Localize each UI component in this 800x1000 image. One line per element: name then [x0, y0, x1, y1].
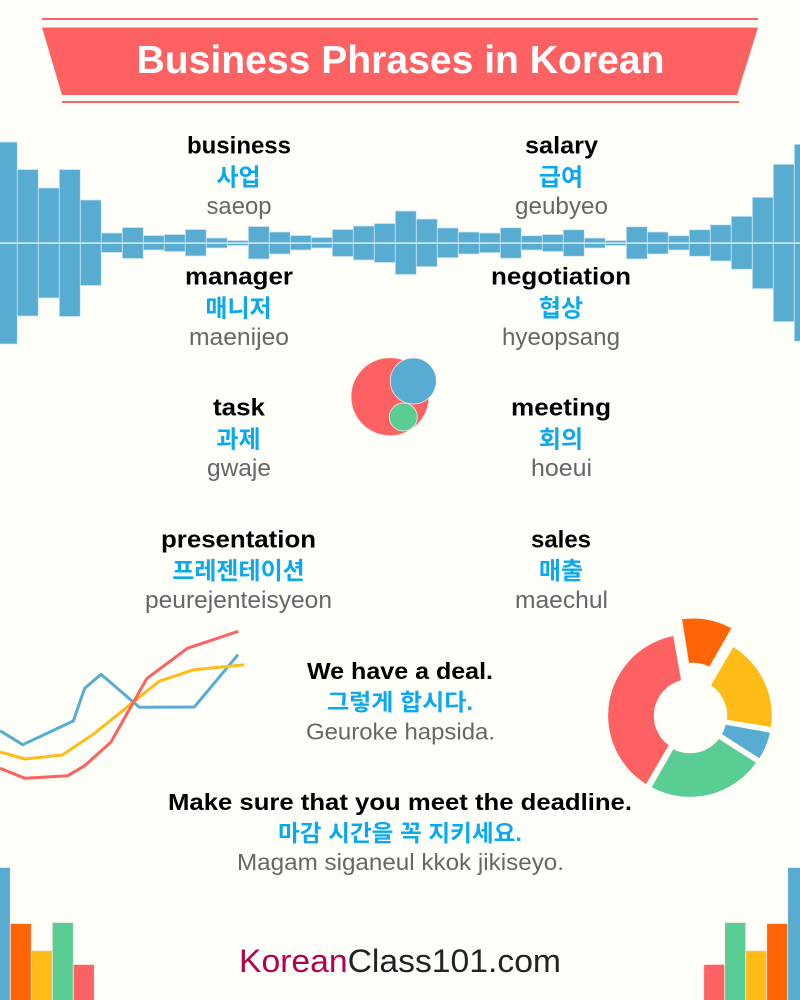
phrase: salary: 급여: [539, 164, 583, 192]
phrase: meeting: hoeui: [531, 455, 592, 482]
phrase: presentation: presentation: [161, 526, 316, 554]
phrase: business: [187, 132, 291, 220]
phrase: manager: maenijeo: [189, 324, 289, 351]
phrase: business: business: [187, 132, 291, 160]
phrase: negotiation: 협상: [539, 296, 583, 322]
phrase: manager: manager: [185, 264, 293, 290]
line chart: [0, 631, 244, 778]
waveform chart: [0, 142, 800, 344]
phrase: task: gwaje: [207, 455, 271, 482]
phrase: meet the deadline: Magam siganeul kkok jikiseyo.: [237, 849, 564, 875]
phrase: salary: salary: [525, 132, 599, 160]
phrase: we have a deal: 그렇게 합시다.: [327, 689, 473, 715]
phrase: presentation: [145, 526, 332, 614]
phrase: manager: [185, 264, 293, 351]
phrase: meeting: 회의: [539, 426, 583, 454]
title banner: [42, 18, 758, 103]
phrase: sales: maechul: [515, 587, 608, 614]
donut chart: [608, 619, 772, 797]
phrase: meeting: [511, 394, 611, 482]
phrase: sales: [515, 526, 608, 614]
phrase: meet the deadline: [168, 789, 632, 875]
phrase: negotiation: [491, 264, 631, 351]
phrase: we have a deal: [306, 658, 495, 744]
bar chart: bottom right: [704, 868, 800, 1000]
phrase: manager: 매니저: [205, 296, 272, 322]
phrase: presentation: peurejenteisyeon: [145, 587, 332, 614]
phrase: salary: geubyeo: [515, 193, 608, 220]
phrase: we have a deal: We have a deal.: [307, 658, 493, 684]
phrase: meet the deadline: Make sure that you meet the deadline.: [168, 789, 632, 815]
phrase: business: saeop: [206, 193, 272, 220]
icon: overlapping circles: [351, 358, 436, 436]
phrase: task: task: [213, 394, 266, 422]
phrase: sales: sales: [531, 526, 591, 554]
title: Business Phrases in Korean: [136, 39, 664, 82]
phrase: negotiation: negotiation: [491, 264, 631, 290]
bar chart: bottom left: [0, 868, 94, 1000]
phrase: meet the deadline: 마감 시간을 꼭 지키세요.: [278, 820, 522, 846]
phrase: sales: 매출: [539, 558, 583, 585]
phrase: meeting: meeting: [511, 394, 611, 422]
phrase: negotiation: hyeopsang: [502, 324, 620, 351]
phrase: business: 사업: [216, 164, 261, 192]
logo: KoreanClass101.com: KoreanClass101.com: [239, 943, 561, 979]
phrase: salary: [515, 132, 608, 220]
phrase: task: [207, 394, 271, 482]
phrase: task: 과제: [216, 426, 261, 454]
phrase: presentation: 프레젠테이션: [172, 558, 305, 585]
phrase: we have a deal: Geuroke hapsida.: [306, 718, 495, 744]
